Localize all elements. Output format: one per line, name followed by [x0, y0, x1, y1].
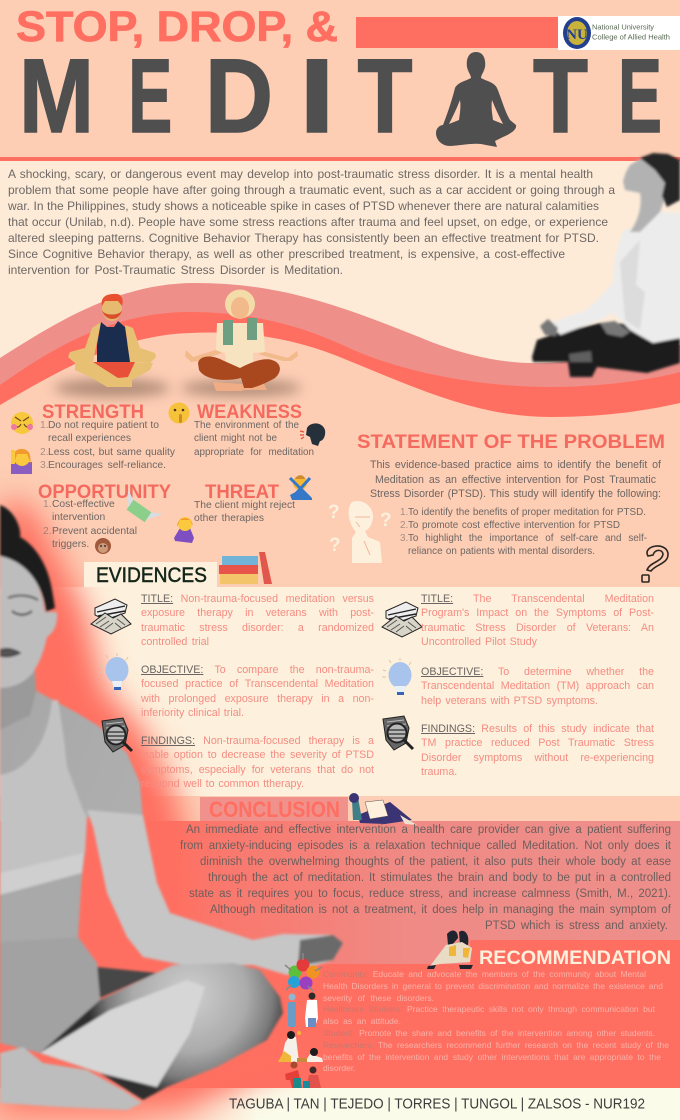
- dark knee shadow patch: [97, 967, 157, 998]
- text: conclusion: Although meditation is not a treatment, it does help in managing the main symptom of: [210, 904, 671, 916]
- icon: university seal: NU: [566, 27, 588, 43]
- upper woman's shirt: [553, 212, 680, 343]
- text: conclusion: from anxiety-inducing episodes is a relaxation technique called Meditation. Not only does it: [180, 840, 671, 852]
- title: stop, drop, &: STOP, DROP, &: [16, 3, 338, 51]
- text: 1.: [400, 507, 408, 518]
- text: recommendations: also as an attitude.: [323, 1016, 401, 1026]
- icon: students: [278, 1031, 323, 1062]
- evidence 1: title: [141, 593, 374, 648]
- man shorts: [93, 362, 135, 378]
- text: conclusion: [180, 824, 671, 932]
- text: statement objectives list: [400, 507, 647, 557]
- heading: conclusion: CONCLUSION: [209, 797, 340, 822]
- heading: threat: THREAT: [205, 482, 279, 503]
- icon: money with wings: [118, 490, 163, 528]
- text: statement of the problem paragraph: Meditation as an effective intervention for Post Traumatic: [375, 474, 656, 486]
- text: strength list: recall experiences: [48, 433, 131, 444]
- heading: strength: STRENGTH: [42, 402, 144, 423]
- icon: shushing face: [168, 402, 190, 424]
- woman crossed leg: [40, 963, 283, 1100]
- feet: [213, 382, 267, 391]
- text: introduction: problem that some people have after going through a traumatic event, such as a car accident or going through a: [8, 183, 615, 197]
- title: meditate: T: [358, 38, 412, 155]
- logo text: [592, 22, 670, 42]
- evidence 2: title: [421, 593, 654, 648]
- icon: thinking person with question marks: [328, 501, 392, 563]
- title: meditate: M: [19, 38, 94, 155]
- icon: large question mark: [642, 546, 668, 582]
- woman pants: [0, 937, 110, 1053]
- panel: recommendation background: [0, 940, 680, 1088]
- panel: evidences background: [0, 587, 680, 796]
- woman torso and shoulders: [0, 640, 143, 1000]
- title: meditate: E: [128, 38, 172, 155]
- text: recommendations: Student: Promote the share and benefits of the intervention among other students.: [323, 1028, 655, 1038]
- photo: seated meditating woman: [0, 505, 343, 1110]
- woman face: [0, 555, 57, 689]
- evidence 1: findings: FINDINGS: Non-trauma-focused therapy is a: [141, 735, 374, 747]
- upper woman's foot: [569, 351, 592, 362]
- text: opportunity list: [43, 499, 137, 550]
- evidence 1: objective: focused practice of Transcendental Meditation: [141, 678, 374, 690]
- text: recommendations: Community: Educate and advocate the members of the community about Mental: [323, 969, 646, 979]
- icon: monkey: [95, 538, 111, 554]
- text: 1.: [43, 499, 52, 510]
- icon: healthcare workers: [288, 992, 318, 1027]
- evidence 2: title: TITLE: The Transcendental Meditation: [421, 593, 654, 605]
- red divider line: [0, 157, 680, 161]
- woman hair: [0, 505, 55, 612]
- evidence 1: objective: [141, 664, 374, 719]
- text: introduction: war. In the Philippines, study shows a noticeable spike in cases of PTSD whenever there are natural calamities: [8, 199, 599, 213]
- text: weakness: [194, 420, 314, 458]
- text: introduction: altered sleeping patterns. Cognitive Behavior Therapy has consistently been an effective treatment for PTSD.: [8, 231, 599, 245]
- text: statement of the problem paragraph: [370, 459, 661, 500]
- evidence 2: findings: [421, 723, 654, 778]
- text: recommendations: benefits of the intervention and study other interventions that are appropriate to the: [323, 1052, 661, 1062]
- text: recommendations: disorder.: [323, 1063, 356, 1073]
- text: conclusion: diminish the overwhelming thoughts of the patient, it also puts their whole body at ease: [200, 856, 671, 868]
- evidence 1: findings: symptoms, especially for veterans that do not: [141, 764, 374, 776]
- icon: meditating silhouette as the letter A: [436, 52, 516, 147]
- text: recommendations: Health Disorders in general to prevent discrimination and normalize the existence and: [323, 981, 663, 991]
- conclusion band background: [0, 796, 680, 821]
- text: statement objectives list: reliance on patients with mental disorders.: [408, 546, 595, 557]
- footer background: [0, 1088, 680, 1120]
- ground shadow: [54, 379, 170, 397]
- icon: woman shrugging: [174, 517, 194, 543]
- arms and hands: [185, 350, 298, 362]
- evidence 2: findings: Disorder symptoms without re-experiencing: [421, 752, 654, 764]
- text: weakness: appropriate for meditation: [194, 447, 314, 458]
- peach body background: [0, 332, 680, 590]
- title: meditate: T: [533, 38, 588, 155]
- evidence 2: title: traumatic Stress Disorder of Veterans: An: [421, 622, 654, 634]
- text: conclusion: state as it requires you to focus, reduce stress, and increase calmness (Smith, M., 2021).: [189, 888, 671, 900]
- title: meditate: [19, 38, 662, 155]
- woman far arm: [87, 810, 343, 975]
- icon: speaking head: [300, 423, 325, 446]
- ground shadow: [181, 379, 301, 397]
- text: 1.: [40, 420, 49, 431]
- woman fingers: [298, 935, 343, 966]
- evidence 1: title: TITLE: Non-trauma-focused meditation versus: [141, 593, 374, 605]
- icon: colourful hands: [285, 953, 322, 991]
- evidence 1: findings: respond well to common ttherapy.: [141, 778, 304, 790]
- evidence 1: findings: [141, 735, 374, 790]
- icon: two friends sitting: [427, 931, 473, 969]
- man arms: [68, 322, 156, 363]
- pink wave: [0, 283, 680, 430]
- text: recommendations: Healthcare Workers: Practice therapeutic skills not only through communication but: [323, 1004, 655, 1014]
- text: introduction: A shocking, scary, or dangerous event may develop into post-traumatic stress disorder. It is a mental health: [8, 167, 593, 181]
- text: recommendations: [323, 969, 669, 1073]
- text: statement objectives list: To highlight the importance of self-care and self-: [408, 533, 647, 544]
- label: evidences: EVIDENCES: [96, 564, 207, 587]
- woman foot: [0, 1047, 142, 1110]
- header background: [0, 0, 680, 157]
- heading: statement of the problem: STATEMENT OF THE PROBLEM: [357, 432, 665, 453]
- heading: opportunity: OPPORTUNITY: [38, 482, 171, 503]
- text: statement objectives list: To promote cost effective intervention for PTSD: [408, 520, 620, 531]
- text: strength list: Encourages self-reliance.: [48, 460, 166, 471]
- icon: reclining reader: [349, 793, 417, 825]
- text: opportunity list: triggers.: [52, 539, 89, 550]
- cream intro background: [0, 161, 680, 421]
- text: 2.: [43, 526, 52, 537]
- evidence 1: objective: inferiority clinical trial.: [141, 707, 244, 719]
- text: 2.: [40, 447, 49, 458]
- crop top band: [0, 853, 84, 895]
- shirt folds: [620, 240, 645, 330]
- red wave: [0, 312, 680, 430]
- hair: [225, 290, 255, 318]
- evidence 1: title: exposure therapy in veterans with post-: [141, 607, 374, 619]
- title: meditate: I: [299, 38, 335, 155]
- logo text: National University: [592, 22, 654, 32]
- text: strength list: [40, 420, 175, 471]
- man tank top: [97, 321, 130, 362]
- face: [231, 297, 249, 319]
- illustration: meditating man: [54, 294, 170, 397]
- woman crop top: [0, 700, 87, 873]
- text: opportunity list: Prevent accidental: [52, 526, 137, 537]
- text: strength list: Do not require patient to: [48, 420, 159, 431]
- text: threat: [194, 500, 295, 524]
- evidence 2: title: Program's Impact on the Symptoms of Post-: [421, 607, 654, 619]
- thinker figure: [349, 501, 382, 563]
- heading: recommendation: RECOMMENDATION: [479, 948, 671, 969]
- text: threat: other therapies: [194, 513, 264, 524]
- evidence 1: findings: viable option to decrease the severity of PTSD: [141, 749, 374, 761]
- evidence 2: title: Uncontrolled Pilot Study: [421, 636, 537, 648]
- photo: woman looking up: [532, 153, 680, 377]
- icon: smiling face: [11, 412, 33, 434]
- text: introduction: that occur (Unilab, n.d). People have some stress reactions after trauma and feel upset, on edge, or experience: [8, 215, 608, 229]
- question marks: [328, 502, 392, 556]
- text: recommendations: Researchers: The researchers recommend further research on the recent study of the: [323, 1040, 669, 1050]
- icon: researchers: [285, 1062, 321, 1088]
- evidence 2: findings: TM practice reduced Post Traumatic Stress: [421, 737, 654, 749]
- text: introduction: [8, 167, 616, 277]
- text: opportunity list: intervention: [52, 512, 105, 523]
- towel: [223, 318, 257, 345]
- text: introduction: Since Cognitive Behavior therapy, as well as other prescribed treatment, is expensive, a cost-effective: [8, 247, 565, 261]
- evidence 2: objective: Transcendental Meditation (TM) approach can: [421, 680, 654, 692]
- text: weakness: The environment of the: [194, 420, 299, 431]
- red header bar: [356, 17, 558, 48]
- evidence 1: objective: OBJECTIVE: To compare the non-trauma-: [141, 664, 374, 676]
- text: conclusion: PTSD which is stress and anxiety.: [485, 920, 668, 932]
- question marks: ?: [380, 510, 392, 531]
- text: recommendations: severity of these disorders.: [323, 993, 434, 1003]
- upper woman's hands: [540, 319, 630, 337]
- icon: man crossing arms: [290, 475, 312, 500]
- title: meditate: D: [205, 38, 273, 155]
- text: 3.: [400, 533, 408, 544]
- evidence 2: objective: help veterans with PTSD symptoms.: [421, 695, 598, 707]
- upper woman's legs: [532, 323, 680, 377]
- text: weakness: client might not be: [194, 433, 277, 444]
- text: conclusion: through the act of meditation. It stimulates the brain and body to be put in a controlled: [208, 872, 671, 884]
- icons: evidence column two: [382, 602, 422, 750]
- evidence 1: title: traumatic stress disorder: a randomized: [141, 622, 374, 634]
- evidence 2: findings: FINDINGS: Results of this study indicate that: [421, 723, 654, 735]
- woman shin: [40, 980, 205, 1087]
- evidence 1: objective: with prolonged exposure therapy in a non-: [141, 693, 374, 705]
- evidence 2: objective: OBJECTIVE: To determine whether the: [421, 666, 654, 678]
- text: 3.: [40, 460, 49, 471]
- upper woman's neck and face: [623, 159, 668, 232]
- text: conclusion: An immediate and effective intervention a health care provider can give a patient suffering: [186, 824, 671, 836]
- evidence 2: findings: trauma.: [421, 766, 457, 778]
- text: introduction: intervention for Post-Traumatic Stress Disorder is Meditation.: [8, 263, 343, 277]
- woman facial features: [0, 596, 38, 657]
- woman neck shadow: [0, 672, 36, 730]
- text: statement objectives list: To identify the benefits of proper meditation for PTSD.: [408, 507, 646, 518]
- red glow behind seated woman: [0, 500, 300, 1110]
- shirt: [216, 323, 265, 368]
- logo panel: national university: [558, 16, 680, 50]
- upper woman's hair: [640, 153, 680, 207]
- icons: evidence column one: [91, 599, 132, 752]
- text: opportunity list: Cost-effective: [52, 499, 115, 510]
- man legs: [75, 362, 153, 387]
- text: statement of the problem paragraph: Stress Disorder (PTSD). This study will identify the following:: [370, 488, 661, 500]
- question marks: ?: [329, 535, 341, 556]
- text: 2.: [400, 520, 408, 531]
- man head and beard: [102, 295, 122, 321]
- icon: stack of colourful books: [219, 552, 272, 584]
- woman midriff: [0, 873, 82, 942]
- solid red behind seated woman arm: [60, 821, 180, 980]
- panel: conclusion background: [0, 821, 680, 964]
- question marks: ?: [328, 502, 340, 523]
- evidence 2: objective: [421, 666, 654, 707]
- illustration: meditating woman: [181, 290, 301, 397]
- pants: [198, 357, 280, 388]
- icon: woman raising hand: [11, 449, 32, 474]
- text: threat: The client might reject: [194, 500, 295, 511]
- logo text: College of Allied Health: [592, 32, 670, 42]
- footer: authors: TAGUBA | TAN | TEJEDO | TORRES | TUNGOL | ZALSOS - NUR192: [229, 1096, 645, 1112]
- text: statement of the problem paragraph: This evidence-based practice aims to identify the benefit of: [370, 459, 661, 471]
- text: strength list: Less cost, but same quality: [48, 447, 175, 458]
- evidence 1: title: controlled trial: [141, 636, 209, 648]
- heading: weakness: WEAKNESS: [197, 402, 302, 423]
